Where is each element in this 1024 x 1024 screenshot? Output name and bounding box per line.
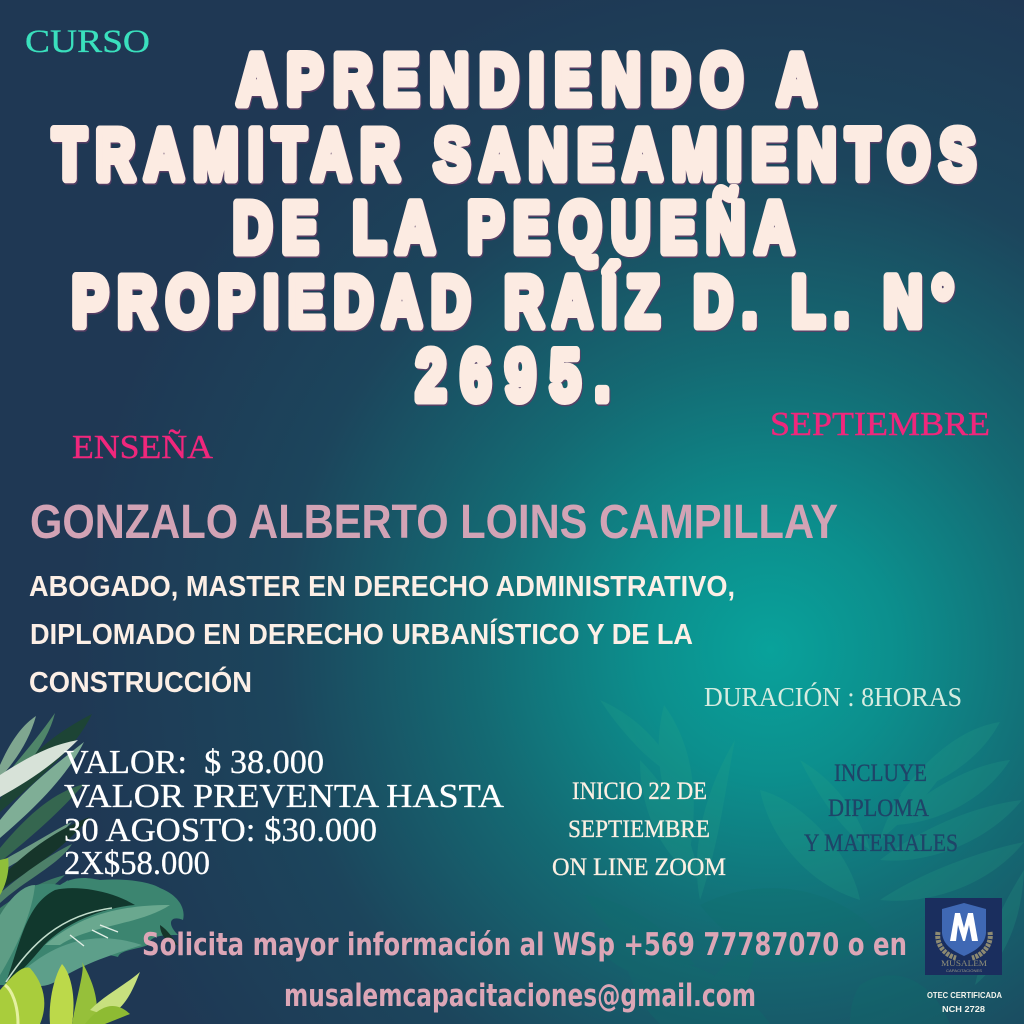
title shadow: TRAMITAR SANEAMIENTOS xyxy=(54,117,977,196)
icon: shield xyxy=(942,903,986,956)
instructor credentials xyxy=(29,571,735,699)
contact xyxy=(142,927,907,1014)
logo subtitle: CAPACITACIONES xyxy=(946,969,983,973)
contact: musalemcapacitaciones@gmail.com xyxy=(284,978,756,1014)
pricing: VALOR: $ 38.000 xyxy=(64,744,324,781)
start date: SEPTIEMBRE xyxy=(568,816,710,843)
tropical leaves bottom left xyxy=(0,713,184,1024)
includes: Y MATERIALES xyxy=(804,830,958,857)
includes: INCLUYE xyxy=(834,760,927,787)
duration: DURACIÓN : 8HORAS xyxy=(704,682,962,712)
instructor credentials: ABOGADO, MASTER EN DERECHO ADMINISTRATIVO, xyxy=(29,571,735,603)
instructor credentials: DIPLOMADO EN DERECHO URBANÍSTICO Y DE LA xyxy=(30,617,693,651)
title lines xyxy=(53,41,976,416)
certification: NCH 2728 xyxy=(942,1004,985,1014)
pricing: VALOR PREVENTA HASTA xyxy=(64,778,504,815)
lime leaves xyxy=(0,962,140,1024)
title shadow: PROPIEDAD RAÍZ D. L. N° xyxy=(73,264,955,343)
logo name: MUSALEM xyxy=(941,959,987,968)
title lines: TRAMITAR SANEAMIENTOS xyxy=(53,116,976,195)
title lines: APRENDIENDO A xyxy=(237,41,816,120)
instructor name: GONZALO ALBERTO LOINS CAMPILLAY xyxy=(30,496,838,549)
title shadow: DE LA PEQUEÑA xyxy=(234,189,795,269)
pricing: 30 AGOSTO: $30.000 xyxy=(64,812,377,849)
certification xyxy=(927,990,1002,1014)
title xyxy=(53,41,977,417)
logo letter xyxy=(950,913,978,941)
title lines: 2695. xyxy=(416,337,610,416)
logo xyxy=(925,898,1002,975)
pricing xyxy=(64,744,504,882)
includes xyxy=(804,760,958,857)
title shadow: 2695. xyxy=(417,338,611,417)
start date xyxy=(552,778,726,881)
label: curso: CURSO xyxy=(25,24,150,60)
pricing: 2X$58.000 xyxy=(64,845,210,882)
includes: DIPLOMA xyxy=(828,795,929,822)
title lines: DE LA PEQUEÑA xyxy=(233,188,794,268)
icon: laurel xyxy=(938,932,990,958)
title lines: PROPIEDAD RAÍZ D. L. N° xyxy=(72,263,954,342)
faint leaves: right background foliage xyxy=(585,700,1024,1024)
instructor credentials: CONSTRUCCIÓN xyxy=(29,665,252,699)
label: ensena: ENSEÑA xyxy=(72,429,213,466)
certification: OTEC CERTIFICADA xyxy=(927,990,1002,1000)
label: septiembre: SEPTIEMBRE xyxy=(770,406,990,443)
start date: INICIO 22 DE xyxy=(572,778,707,805)
dark fronds xyxy=(0,713,92,945)
start date: ON LINE ZOOM xyxy=(552,854,726,881)
big palm leaf xyxy=(0,878,184,986)
title shadow xyxy=(54,42,977,417)
title shadow: APRENDIENDO A xyxy=(238,42,817,121)
